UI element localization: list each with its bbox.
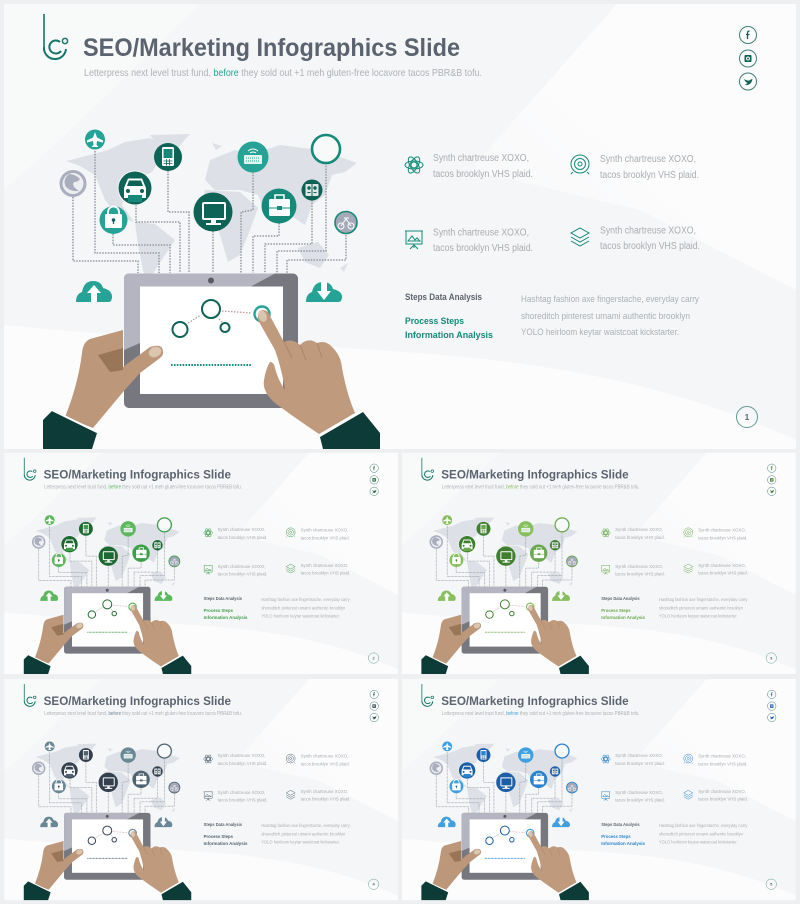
- slide variant: green: [4, 453, 398, 674]
- logo: [44, 14, 68, 59]
- tablet screen diagram: [171, 300, 270, 365]
- slide variant: green: tacos brooklyn VHS plaid.: [218, 572, 267, 578]
- slide variant: blue: Synth chartreuse XOXO,: [698, 789, 746, 795]
- world map: [66, 134, 357, 285]
- slide variant: green: Hashtag fashion axe fingerstache, everyday carry: [261, 597, 350, 603]
- steps heading: Steps Data Analysis: [405, 292, 482, 303]
- slide variant: green: tacos brooklyn VHS plaid.: [301, 571, 350, 577]
- slide variant: blue: Letterpress next level trust fund, before they sold out +1 meh gluten-free locavore tacos PBR&B tofu.: [442, 711, 640, 717]
- feature text: layers: tacos brooklyn VHS plaid.: [600, 241, 700, 252]
- slide variant: slate: Steps Data Analysis: [204, 822, 242, 828]
- slide variant: lime: 3: [770, 656, 773, 661]
- left sleeve: [43, 410, 97, 449]
- slide variant: lime: tacos brooklyn VHS plaid.: [698, 571, 748, 577]
- slide variant: slate: Letterpress next level trust fund, before they sold out +1 meh gluten-free locavore tacos PBR&B tofu.: [44, 711, 242, 717]
- slide variant: slate: SEO/Marketing Infographics Slide: [44, 694, 231, 708]
- feature icons: [405, 155, 589, 249]
- tablet: [124, 274, 298, 408]
- slide variant: lime: Steps Data Analysis: [601, 596, 640, 602]
- slide variant: slate: Synth chartreuse XOXO,: [301, 789, 348, 795]
- process heading: Information Analysis: [405, 330, 493, 341]
- feature text: presentation: tacos brooklyn VHS plaid.: [433, 243, 533, 254]
- slide variant: green: Synth chartreuse XOXO,: [301, 563, 348, 569]
- icon: car: [118, 170, 152, 206]
- slide variant: blue: tacos brooklyn VHS plaid.: [698, 797, 748, 803]
- feature text: atom: tacos brooklyn VHS plaid.: [433, 169, 533, 180]
- slide variant: blue: Synth chartreuse XOXO,: [615, 790, 663, 796]
- slide variant: slate: Hashtag fashion axe fingerstache, everyday carry: [261, 823, 350, 829]
- dotted connector lines: [73, 151, 346, 273]
- slide variant: slate: Information Analysis: [204, 841, 248, 847]
- slide variant: green: shoreditch pinterest umami authentic brooklyn: [261, 605, 346, 611]
- slide variant: blue: Synth chartreuse XOXO,: [615, 753, 663, 759]
- slide variant: slate: Process Steps: [204, 834, 233, 840]
- icon: lock: [100, 206, 128, 234]
- slide variant: lime: SEO/Marketing Infographics Slide: [441, 468, 629, 482]
- slide variant: blue: Information Analysis: [601, 841, 645, 847]
- page number: 1: [745, 413, 750, 422]
- slide variant: blue: tacos brooklyn VHS plaid.: [615, 798, 665, 804]
- slide variant: lime: shoreditch pinterest umami authentic brooklyn: [659, 605, 743, 611]
- icon: keyboard: [238, 142, 268, 172]
- icon: briefcase: [262, 188, 296, 224]
- slide variant: lime: Synth chartreuse XOXO,: [698, 527, 746, 533]
- slide variant: slate: Synth chartreuse XOXO,: [301, 754, 348, 760]
- slide variant: blue: Steps Data Analysis: [601, 822, 640, 828]
- page number ring: [736, 406, 758, 428]
- slide variant: slate: [4, 679, 398, 900]
- slide variant: slate: tacos brooklyn VHS plaid.: [218, 798, 267, 804]
- icon: phone: [154, 143, 182, 171]
- slide variant: slate: YOLO heirloom keytar waistcoat kickstarter.: [261, 839, 340, 845]
- slide variant: green: tacos brooklyn VHS plaid.: [301, 535, 350, 541]
- slide variant: lime: Synth chartreuse XOXO,: [615, 527, 663, 533]
- slide variant: lime: Synth chartreuse XOXO,: [698, 563, 746, 569]
- icon: download cloud: [306, 282, 342, 302]
- slide variant: slate: shoreditch pinterest umami authentic brooklyn: [261, 832, 346, 838]
- slide variant: green: Synth chartreuse XOXO,: [218, 527, 265, 533]
- slide variant: blue: YOLO heirloom keytar waistcoat kickstarter.: [659, 839, 737, 845]
- slide variant: slate: tacos brooklyn VHS plaid.: [218, 761, 267, 767]
- slide variant: lime: Hashtag fashion axe fingerstache, everyday carry: [659, 597, 748, 603]
- slide variant: slate: Synth chartreuse XOXO,: [218, 790, 265, 796]
- slide variant: green: Information Analysis: [204, 615, 248, 621]
- slide variant: lime: YOLO heirloom keytar waistcoat kickstarter.: [659, 613, 737, 619]
- slide variant: lime: Letterpress next level trust fund, before they sold out +1 meh gluten-free locavore tacos PBR&B tofu.: [442, 485, 640, 491]
- slide variant: blue: tacos brooklyn VHS plaid.: [615, 761, 665, 767]
- feature text: atom: Synth chartreuse XOXO,: [433, 153, 529, 164]
- slide variant: lime: [402, 453, 796, 674]
- icon: monitor: [194, 192, 232, 232]
- feature text: target: tacos brooklyn VHS plaid.: [600, 170, 699, 181]
- paragraph: Hashtag fashion axe fingerstache, everyday carry: [521, 294, 699, 305]
- slide variant: lime: tacos brooklyn VHS plaid.: [615, 572, 665, 578]
- social icons: [740, 26, 756, 90]
- icon: open ring: [312, 135, 340, 163]
- slide variant: blue: tacos brooklyn VHS plaid.: [698, 761, 747, 767]
- slide variant: slate: tacos brooklyn VHS plaid.: [301, 797, 350, 803]
- slide variant: blue: Synth chartreuse XOXO,: [698, 754, 746, 760]
- slide variant: blue: shoreditch pinterest umami authentic brooklyn: [659, 832, 743, 838]
- slide variant: lime: tacos brooklyn VHS plaid.: [698, 535, 747, 541]
- slide variant: lime: Process Steps: [601, 608, 631, 614]
- slide variant: green: SEO/Marketing Infographics Slide: [44, 468, 231, 482]
- slide variant: green: YOLO heirloom keytar waistcoat kickstarter.: [261, 613, 340, 619]
- slide variant: slate: tacos brooklyn VHS plaid.: [301, 761, 350, 767]
- icon: bicycle: [335, 212, 357, 234]
- slide variant: green: tacos brooklyn VHS plaid.: [218, 535, 267, 541]
- paragraph: shoreditch pinterest umami authentic brooklyn: [521, 311, 690, 322]
- slide variant: slate: 4: [373, 882, 376, 887]
- slide variant: lime: Information Analysis: [601, 615, 645, 621]
- slide background: [4, 4, 796, 449]
- slide variant: green: 2: [373, 656, 376, 661]
- slide variant: lime: Synth chartreuse XOXO,: [615, 564, 663, 570]
- feature text: layers: Synth chartreuse XOXO,: [600, 226, 696, 236]
- icon: plane: [84, 129, 106, 150]
- slide variant: green: Synth chartreuse XOXO,: [301, 527, 348, 533]
- right hand: [257, 309, 355, 434]
- slide variant: blue: Process Steps: [601, 834, 631, 840]
- paragraph: YOLO heirloom keytar waistcoat kickstarter.: [521, 327, 679, 338]
- slide variant: slate: Synth chartreuse XOXO,: [218, 753, 265, 759]
- slide variant: blue: Hashtag fashion axe fingerstache, everyday carry: [659, 823, 748, 829]
- slide variant: blue: SEO/Marketing Infographics Slide: [441, 694, 629, 708]
- main slide: teal: [4, 4, 796, 449]
- title: SEO/Marketing Infographics Slide: [83, 34, 460, 62]
- icon: speakers: [302, 180, 322, 200]
- slide variant: blue: [402, 679, 796, 900]
- slide variant: green: Letterpress next level trust fund, before they sold out +1 meh gluten-free locavore tacos PBR&B tofu.: [44, 485, 242, 491]
- icon: upload cloud: [76, 281, 112, 302]
- slide variant: lime: tacos brooklyn VHS plaid.: [615, 535, 665, 541]
- process heading: Process Steps: [405, 316, 464, 327]
- icon: globe: [60, 170, 86, 197]
- feature text: presentation: Synth chartreuse XOXO,: [433, 228, 529, 238]
- right sleeve: [319, 411, 380, 449]
- slide variant: blue: 5: [770, 882, 773, 887]
- slide variant: green: Steps Data Analysis: [204, 596, 242, 602]
- feature text: target: Synth chartreuse XOXO,: [600, 154, 696, 165]
- subtitle: Letterpress next level trust fund, before they sold out +1 meh gluten-free locavore tacos PBR&B tofu.: [84, 67, 482, 79]
- slide variant: green: Synth chartreuse XOXO,: [218, 564, 265, 570]
- slide variant: green: Process Steps: [204, 608, 233, 614]
- left hand: [65, 330, 163, 428]
